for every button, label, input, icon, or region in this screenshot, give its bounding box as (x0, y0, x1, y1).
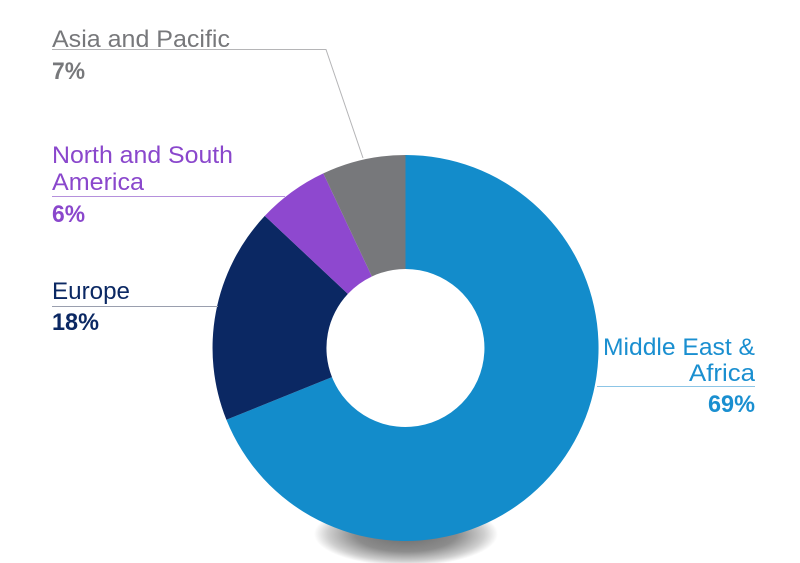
leader line: North and South America (52, 196, 285, 198)
leader line: Asia and Pacific (52, 50, 363, 158)
label: Middle East & Africa (597, 334, 756, 418)
donut drop shadow (314, 502, 498, 563)
segment: North and South America 6% (265, 173, 372, 294)
segment: Middle East & Africa 69% (226, 155, 599, 541)
label: Middle East & Africa: Middle East & (603, 334, 755, 361)
label: Middle East & Africa: Africa (689, 360, 756, 387)
label: Europe (52, 278, 218, 336)
label: North and South America (52, 142, 285, 228)
donut chart (213, 155, 599, 541)
leader line: Europe (52, 306, 218, 308)
label: Asia and Pacific: Asia and Pacific (52, 26, 230, 53)
label: North and South America: America (52, 169, 145, 196)
label: Europe: 18% (52, 309, 99, 336)
leader line: Middle East & Africa (597, 386, 755, 388)
segment: Asia and Pacific 7% (323, 155, 406, 276)
label: North and South America: 6% (52, 201, 85, 228)
segment: Europe 18% (213, 216, 348, 420)
label: North and South America: North and South (52, 142, 233, 169)
label: Asia and Pacific (52, 26, 363, 158)
label: Europe: Europe (52, 278, 130, 305)
label: Middle East & Africa: 69% (708, 391, 755, 418)
label: Asia and Pacific: 7% (52, 58, 85, 85)
